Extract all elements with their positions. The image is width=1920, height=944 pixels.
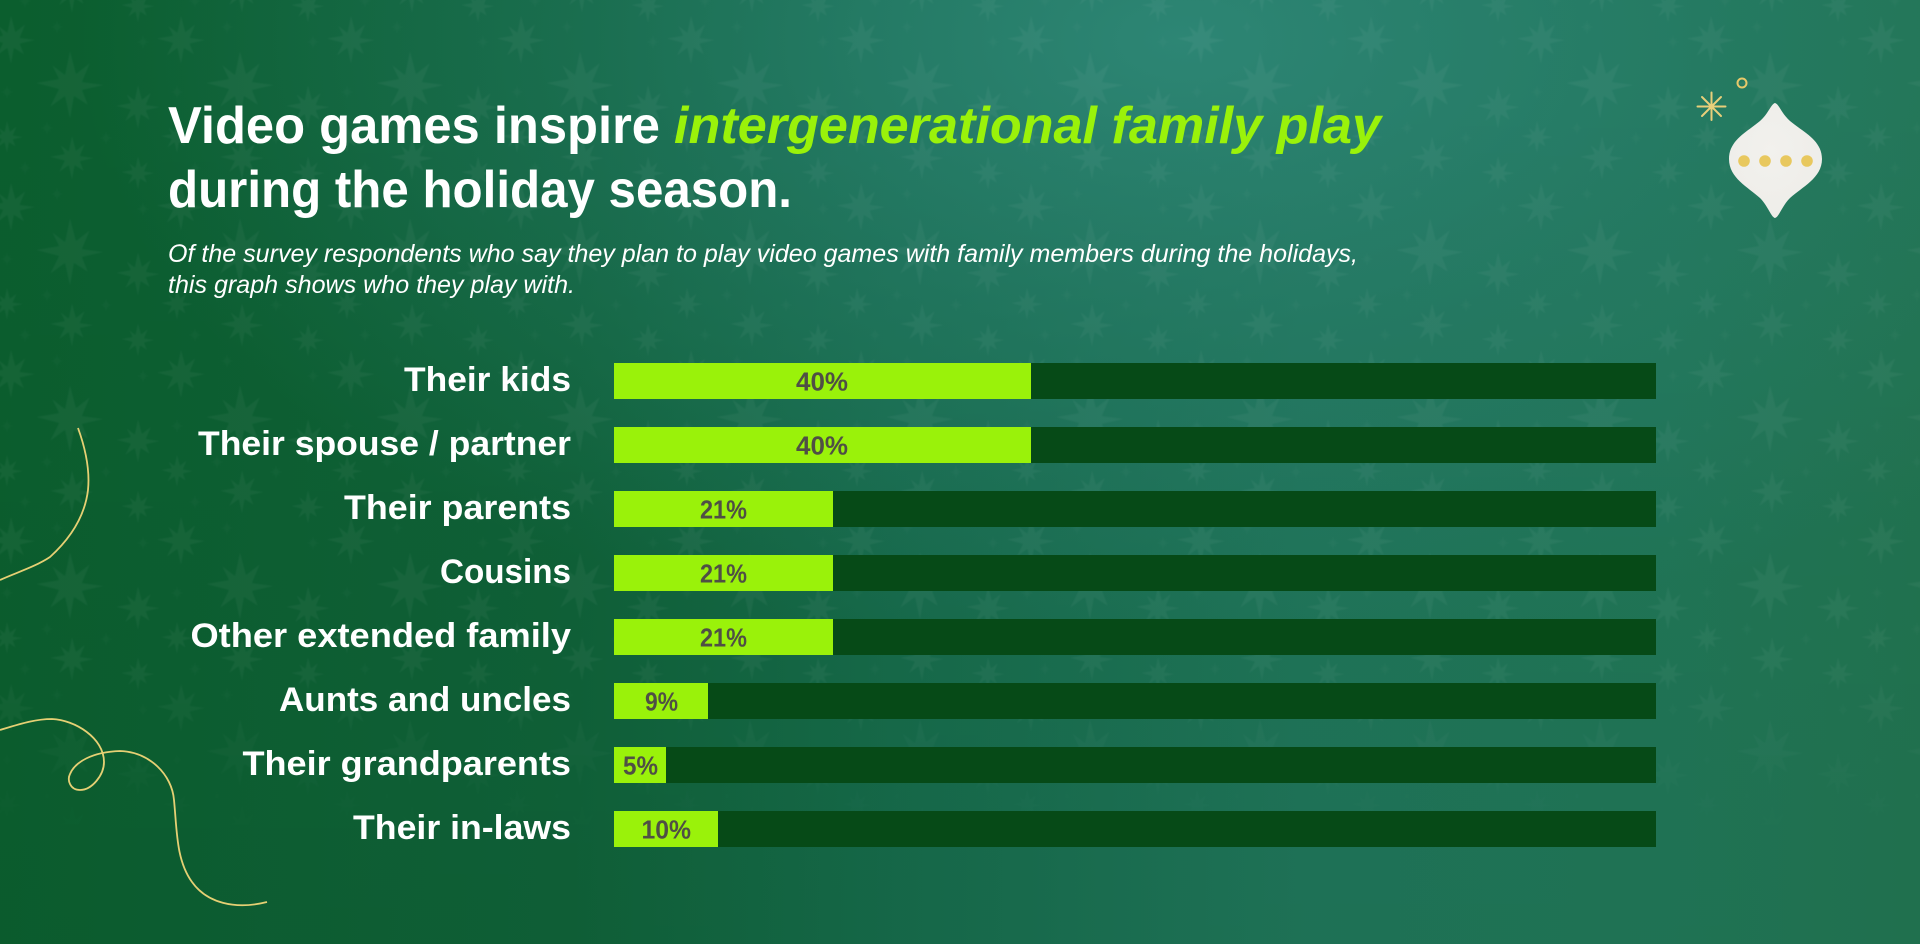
row: Their grandparents 5% [242, 745, 1656, 783]
bar chart [190, 361, 1656, 847]
row: Cousins 21% [440, 553, 1656, 591]
title: Video games inspire [168, 97, 660, 155]
subtitle: this graph shows who they play with. [168, 271, 575, 299]
row: Their spouse / partner 40%: 40% [796, 430, 848, 460]
decorative gold ribbon lower [0, 719, 267, 905]
row: Their spouse / partner 40%: Their spouse / partner [198, 425, 571, 463]
subtitle [168, 240, 1358, 299]
row: Aunts and uncles 9% [279, 681, 1656, 719]
title [168, 97, 1384, 219]
icon: gold sparkle [1698, 92, 1726, 120]
row: Their kids 40%: Their kids [404, 361, 571, 399]
row: Their kids 40%: 40% [796, 366, 848, 396]
title: during the holiday season. [168, 161, 792, 219]
row: Their kids 40% [404, 361, 1656, 399]
icon: ornament with gold dots [1729, 103, 1822, 218]
decorative gold ribbon upper [0, 428, 89, 580]
row: Their in-laws 10%: 10% [642, 814, 691, 844]
row: Cousins 21%: 21% [700, 558, 747, 588]
row: Their grandparents 5%: Their grandparents [242, 745, 571, 783]
row: Their in-laws 10%: Their in-laws [353, 809, 571, 847]
row: Other extended family 21%: 21% [700, 622, 747, 652]
row: Their parents 21% [344, 489, 1656, 527]
row: Their spouse / partner 40% [198, 425, 1656, 463]
subtitle: Of the survey respondents who say they plan to play video games with family members during the holidays, [168, 240, 1358, 268]
row: Their parents 21%: 21% [700, 494, 747, 524]
row: Their in-laws 10% [353, 809, 1656, 847]
row: Other extended family 21% [190, 617, 1656, 655]
row: Aunts and uncles 9%: 9% [645, 686, 678, 716]
row: Their grandparents 5%: 5% [623, 750, 658, 780]
row: Their parents 21%: Their parents [344, 489, 571, 527]
icon: gold ring [1738, 78, 1746, 88]
title: intergenerational family play [674, 97, 1384, 155]
row: Aunts and uncles 9%: Aunts and uncles [279, 681, 571, 719]
row: Other extended family 21%: Other extended family [190, 617, 571, 655]
row: Cousins 21%: Cousins [440, 553, 571, 591]
